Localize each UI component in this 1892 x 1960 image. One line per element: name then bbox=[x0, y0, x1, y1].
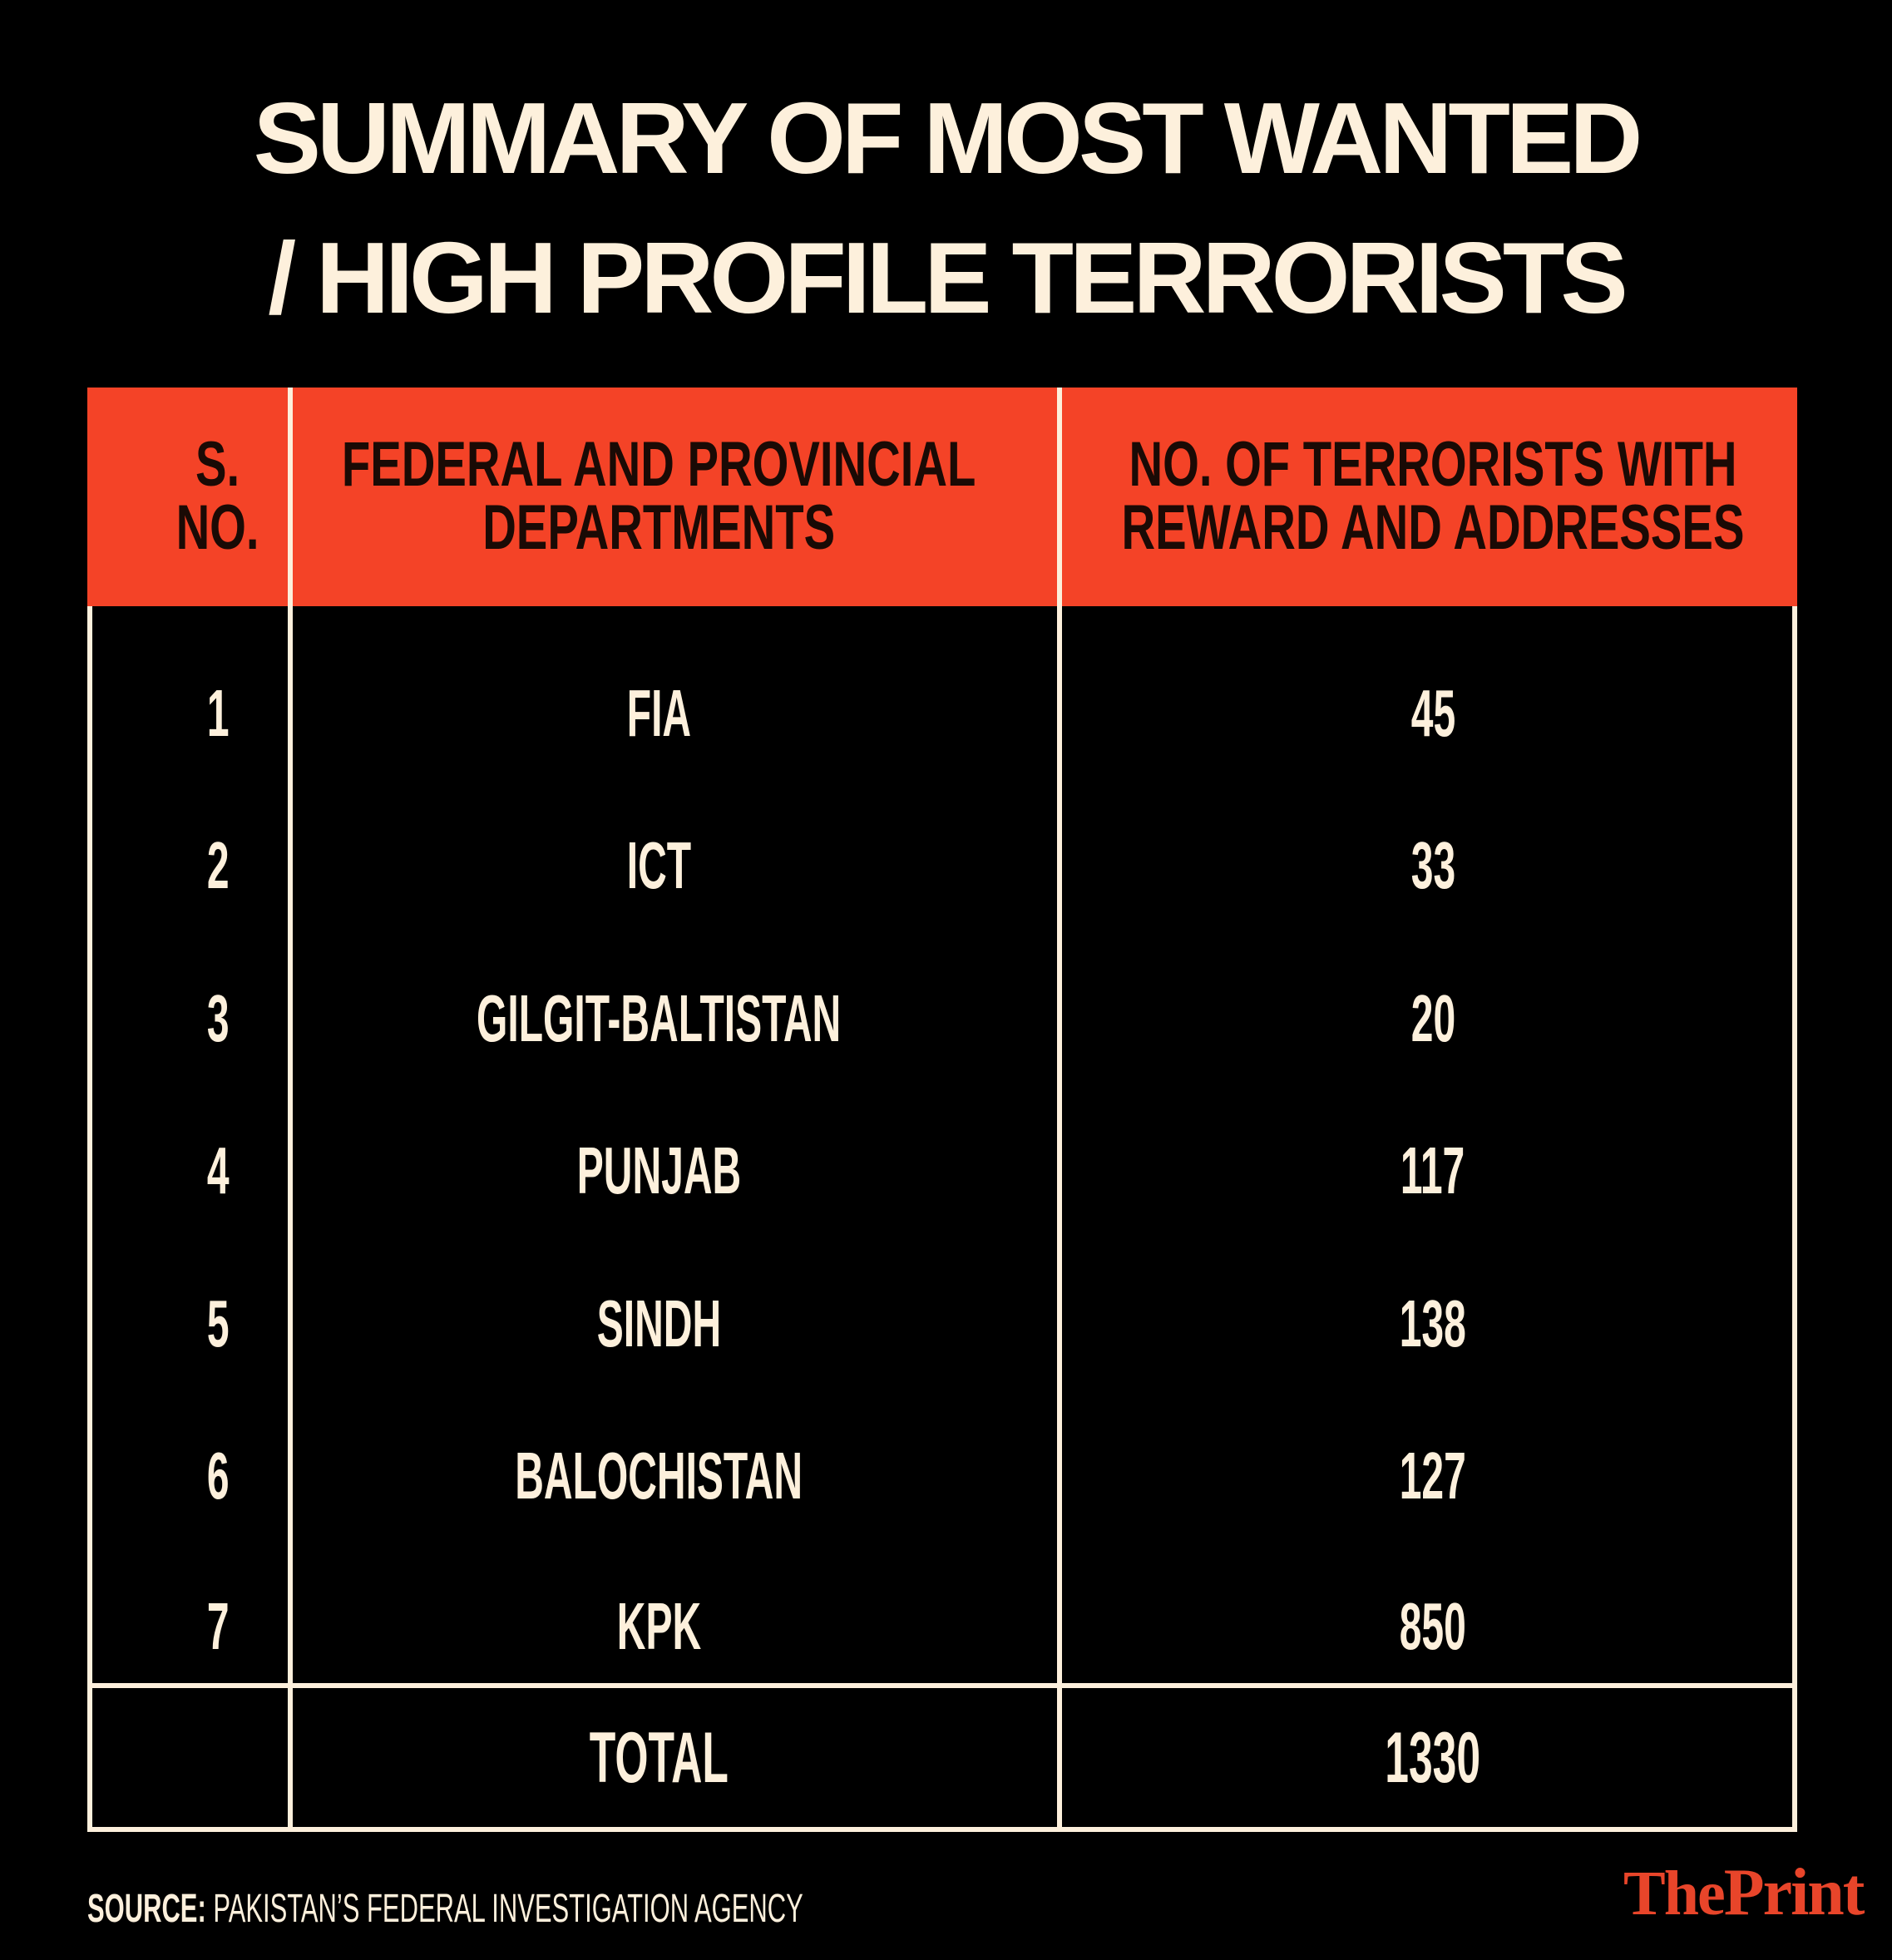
header row bbox=[87, 388, 1797, 606]
rows: PUNJAB bbox=[576, 1133, 741, 1207]
rows bbox=[207, 676, 1466, 1663]
logo: ThePrint: ThePrint bbox=[1623, 1856, 1863, 1929]
source note: SOURCE: PAKISTAN’S FEDERAL INVESTIGATION AGENCY bbox=[87, 1887, 803, 1931]
rows: 7 bbox=[207, 1589, 229, 1663]
table bbox=[87, 388, 1797, 1832]
header: s. no.: S. bbox=[195, 429, 240, 500]
rows: BALOCHISTAN bbox=[515, 1439, 803, 1513]
rows: GILGIT-BALTISTAN bbox=[477, 981, 841, 1055]
header: s. no. bbox=[176, 429, 259, 563]
rows: 127 bbox=[1400, 1439, 1466, 1513]
rows: 20 bbox=[1410, 981, 1455, 1055]
rows: SINDH bbox=[596, 1286, 721, 1360]
rows: FIA bbox=[626, 676, 691, 750]
rows: 33 bbox=[1410, 828, 1455, 902]
header: number: REWARD AND ADDRESSES bbox=[1122, 492, 1744, 563]
rows: 2 bbox=[207, 828, 229, 902]
rows: KPK bbox=[616, 1589, 701, 1663]
rows: 3 bbox=[207, 981, 229, 1055]
rows: 138 bbox=[1400, 1286, 1466, 1360]
total row bbox=[589, 1718, 1480, 1798]
header: s. no.: NO. bbox=[176, 492, 259, 563]
title: / HIGH PROFILE TERRORISTS bbox=[268, 221, 1624, 334]
rows: 1 bbox=[207, 676, 229, 750]
rows: 45 bbox=[1410, 676, 1455, 750]
header: departments: DEPARTMENTS bbox=[482, 492, 835, 563]
header: departments: FEDERAL AND PROVINCIAL bbox=[342, 429, 976, 500]
header: departments bbox=[342, 429, 976, 563]
rows: 117 bbox=[1400, 1133, 1465, 1207]
total row: 1330 bbox=[1386, 1718, 1480, 1798]
header: number: NO. OF TERRORISTS WITH bbox=[1129, 429, 1737, 500]
title bbox=[254, 81, 1638, 334]
rows: 850 bbox=[1400, 1589, 1466, 1663]
rows: 5 bbox=[207, 1286, 229, 1360]
rows: ICT bbox=[626, 828, 691, 902]
rows: 6 bbox=[207, 1439, 229, 1513]
title: SUMMARY OF MOST WANTED bbox=[254, 81, 1638, 195]
header: number bbox=[1122, 429, 1744, 563]
rows: 4 bbox=[207, 1133, 229, 1207]
total row: TOTAL bbox=[589, 1718, 729, 1798]
